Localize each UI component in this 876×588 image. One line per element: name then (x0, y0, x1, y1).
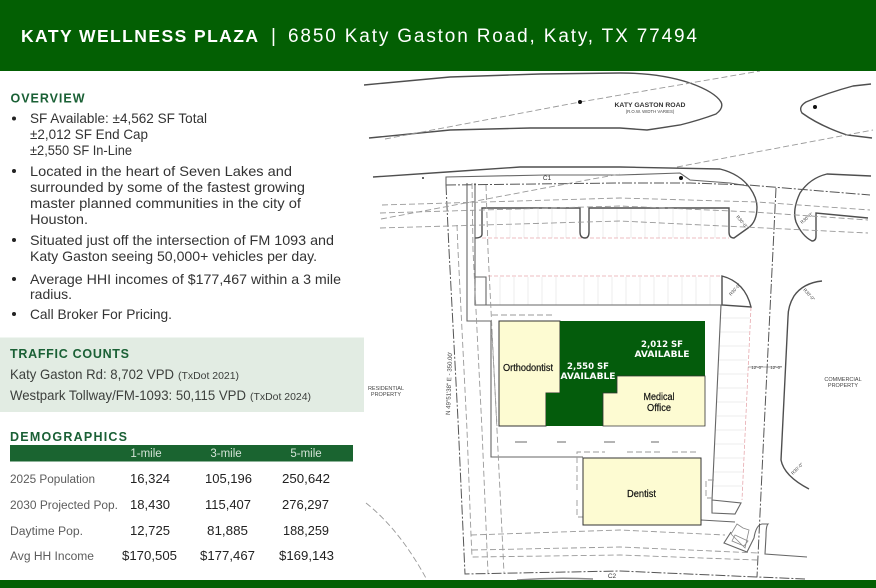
site plan map (364, 71, 873, 580)
row: average household income: $170,505 (122, 548, 177, 563)
map annotations: PROPERTY (828, 383, 858, 389)
building: Dentist (583, 458, 701, 525)
overview bullet: intersection: Situated just off the intersection of FM 1093 and (30, 232, 334, 248)
row: 2025 population: 16,324 (130, 471, 170, 486)
building: Medical Office suite: Medical (644, 392, 674, 403)
row: daytime population (10, 523, 329, 538)
map annotations: COMMERCIAL (824, 377, 862, 383)
row: 2025 population: 105,196 (205, 471, 252, 486)
demographics table header: 3-mile (210, 448, 242, 460)
overview heading: OVERVIEW (10, 92, 85, 106)
row: daytime population: 12,725 (130, 523, 170, 538)
row: 2025 population: 250,642 (282, 471, 330, 486)
row: 2030 projected population: 276,297 (282, 497, 329, 512)
map annotations (368, 109, 862, 580)
title: KATY WELLNESS PLAZA (21, 26, 258, 46)
demographics table header: 5-mile (290, 448, 322, 460)
overview bullet: incomes: radius. (30, 286, 72, 302)
traffic counts panel (0, 338, 364, 412)
overview bullet: location: Houston. (30, 211, 88, 227)
overview bullet: SF available (12, 110, 207, 158)
row: 2025 population: 2025 Population (10, 474, 95, 486)
building: Dentist: Dentist (627, 489, 656, 500)
overview section (10, 92, 341, 322)
map annotations: 12'-0" (751, 365, 763, 370)
map annotations: R30'-0" (735, 214, 749, 229)
map annotations: R30'-0" (790, 461, 804, 476)
map annotations: R30'-0" (802, 287, 816, 302)
demographics table header (10, 445, 353, 462)
footer band (0, 580, 876, 588)
traffic heading: TRAFFIC COUNTS (10, 347, 129, 361)
building: 2,550 SF available suite: AVAILABLE (560, 372, 616, 382)
map annotations: C1 (543, 175, 552, 182)
row: 2025 population (10, 471, 330, 486)
row: 2030 projected population: 18,430 (130, 497, 170, 512)
overview bullet: incomes (12, 271, 341, 302)
traffic line: Westpark Tollway: (TxDot 2024) (250, 392, 311, 403)
row: daytime population: 188,259 (283, 523, 329, 538)
parking stalls and site lines (366, 167, 871, 580)
traffic line: Westpark Tollway: Westpark Tollway/FM-1093: 50,115 VPD (10, 387, 246, 403)
map annotations: R30'-0" (728, 282, 742, 297)
overview bullet: location: surrounded by some of the fastest growing (30, 179, 305, 195)
building: 2,012 SF available suite: AVAILABLE (634, 350, 690, 360)
demographics section (10, 430, 353, 563)
map annotations: C2 (608, 573, 617, 580)
overview bullet: location: Located in the heart of Seven Lakes and (30, 163, 292, 179)
row: 2030 projected population (10, 497, 329, 512)
overview bullet: SF available: ±2,012 SF End Cap (30, 126, 148, 142)
road label: KATY GASTON ROAD (614, 102, 686, 109)
address: 6850 Katy Gaston Road, Katy, TX 77494 (288, 26, 697, 47)
overview bullet: location (12, 163, 305, 227)
row: daytime population: 81,885 (207, 523, 248, 538)
row: 2030 projected population: 115,407 (205, 497, 251, 512)
overview bullet: incomes: Average HHI incomes of $177,467 within a 3 mile (30, 271, 341, 287)
building: 2,012 SF available suite: 2,012 SF (641, 340, 683, 350)
left panel background (0, 71, 364, 337)
divider bar: | (271, 26, 276, 47)
overview bullet: pricing: Call Broker For Pricing. (30, 306, 172, 322)
map annotations: N 49°51'38" E - 350.00' (444, 352, 454, 415)
map annotations: R30'-0" (799, 211, 814, 225)
row: average household income: $169,143 (279, 548, 334, 563)
overview bullet: location: master planned communities in the city of (30, 195, 301, 211)
map annotations: RESIDENTIAL (368, 386, 404, 392)
traffic line: Katy Gaston Rd: (TxDot 2021) (178, 371, 239, 382)
overview bullet: SF available: ±2,550 SF In-Line (30, 142, 132, 158)
building: 2,550 SF available suite (546, 321, 617, 426)
overview bullet: SF available: SF Available: ±4,562 SF Total (30, 110, 207, 126)
title banner (0, 0, 876, 71)
map annotations: PROPERTY (371, 392, 401, 398)
building: Medical Office suite (603, 376, 705, 426)
building: Medical Office suite: Office (647, 403, 671, 414)
overview bullet: intersection (12, 232, 334, 264)
row: daytime population: Daytime Pop. (10, 526, 83, 538)
map annotations: (R.O.W. WIDTH VARIES) (626, 109, 675, 114)
row: average household income (10, 548, 334, 563)
overview bullet: intersection: Katy Gaston seeing 50,000+ vehicles per day. (30, 248, 317, 264)
map annotations: 12'-0" (770, 365, 782, 370)
row: 2030 projected population: 2030 Projected Pop. (10, 500, 118, 512)
building: 2,550 SF available suite: 2,550 SF (567, 362, 609, 372)
row: average household income: $177,467 (200, 548, 255, 563)
building: Orthodontist suite: Orthodontist (503, 363, 553, 374)
road: Katy Gaston Road median and curbs (364, 71, 873, 167)
building: 2,012 SF available suite (617, 321, 705, 376)
traffic line: Katy Gaston Rd: Katy Gaston Rd: 8,702 VPD (10, 366, 174, 382)
demographics heading: DEMOGRAPHICS (10, 430, 127, 444)
demographics table header: 1-mile (130, 448, 162, 460)
building: Orthodontist suite (499, 321, 560, 426)
row: average household income: Avg HH Income (10, 551, 94, 563)
